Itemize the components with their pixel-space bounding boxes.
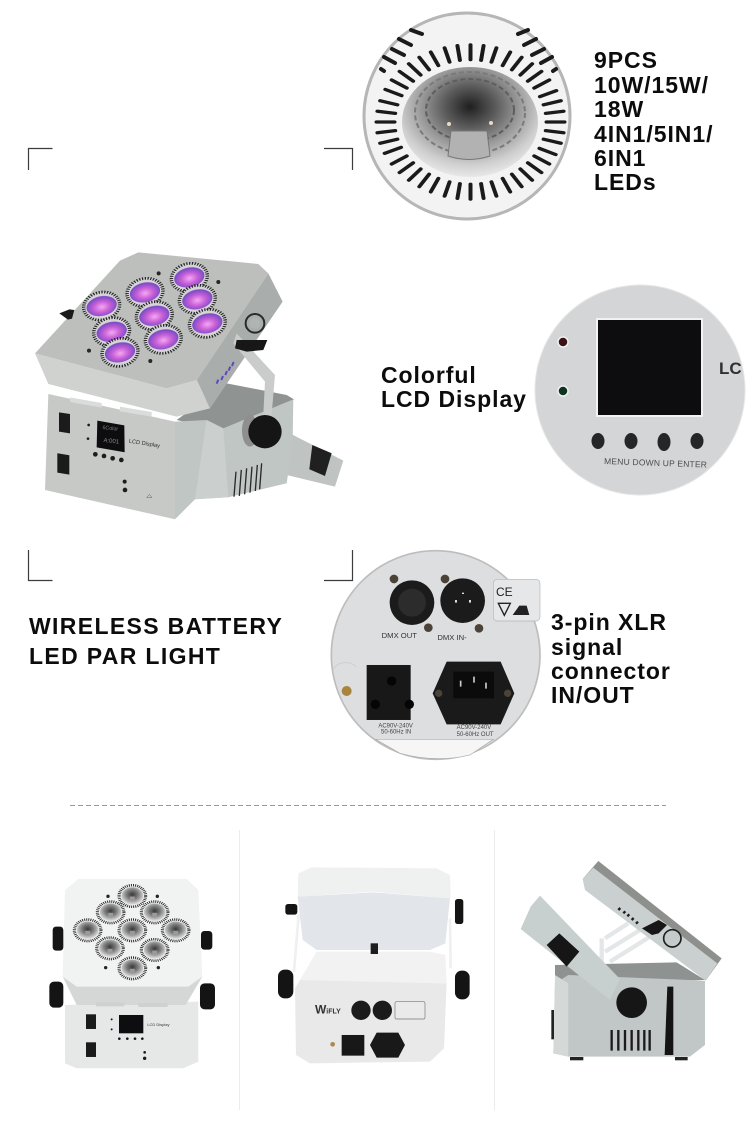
AC output label: 50-60Hz OUT (457, 732, 494, 738)
front base (65, 1002, 198, 1068)
connector caption: signal (551, 634, 623, 660)
DMX OUT connector (390, 575, 434, 632)
hinges (70, 397, 152, 417)
certification marks: CE (496, 585, 513, 599)
lamp head (298, 867, 451, 950)
panel controls (86, 1014, 146, 1060)
product view: side (521, 861, 722, 1060)
fan (664, 930, 681, 947)
LED specification text: 9PCS (594, 47, 658, 73)
stand label (309, 445, 332, 476)
dashed divider (70, 804, 666, 806)
LED vent slots (376, 30, 565, 199)
LCD Display label: LCD Display (147, 1022, 169, 1027)
LEDs (74, 885, 189, 979)
LED specification text: LEDs (594, 169, 657, 195)
LCD black screen (597, 319, 702, 416)
button labels: MENU DOWN UP ENTER (604, 456, 707, 470)
LCD screen (97, 421, 125, 452)
fan and side indicators (217, 314, 264, 384)
OUT socket (370, 1033, 405, 1058)
cert marks (395, 1002, 425, 1019)
certification marks (493, 579, 540, 621)
brass ground screw (333, 663, 356, 696)
ground screw (330, 1042, 335, 1047)
front buttons and indicators (87, 424, 152, 498)
left wing knob (59, 309, 74, 320)
head knob (235, 340, 267, 352)
rear socket edges (551, 1010, 554, 1039)
side knob (242, 415, 282, 448)
LED specification text: 6IN1 (594, 145, 646, 171)
lamp LEDs (81, 260, 228, 370)
side knobs (278, 899, 470, 999)
lamp head (35, 252, 283, 417)
IN socket (342, 1035, 364, 1056)
control buttons (592, 433, 704, 451)
lower edge band (376, 739, 493, 759)
corner brackets frame (28, 148, 352, 580)
base top (555, 962, 705, 983)
lamp face (63, 879, 202, 987)
DMX IN connector (440, 575, 485, 633)
lamp bevel (63, 977, 202, 1005)
base top surface (177, 383, 294, 430)
LED specification text: 10W/15W/ (594, 72, 709, 98)
screws (104, 895, 160, 969)
AC input label: 50-60Hz IN (381, 729, 411, 735)
vent grille (612, 1030, 650, 1051)
AC output label: AC90V-240V (457, 725, 491, 731)
connector caption: connector (551, 658, 671, 684)
LED specification text: 18W (594, 96, 644, 122)
LED close-up circle (364, 13, 570, 219)
base (295, 952, 447, 1063)
product title: LED PAR LIGHT (29, 643, 221, 669)
product title: WIRELESS BATTERY (29, 613, 283, 639)
status LEDs (558, 337, 568, 396)
head indicators (618, 908, 638, 924)
yoke bracket (233, 333, 275, 415)
connector caption: 3-pin XLR (551, 609, 667, 635)
yoke arms (602, 923, 650, 965)
rear connector close-up circle: DMX IN- (437, 633, 467, 642)
DMX connectors (351, 1001, 392, 1020)
main product: par light with purple LEDs: A:001 (103, 438, 120, 446)
rear connector close-up circle (331, 551, 540, 759)
head screws (87, 271, 220, 363)
Wifly logo: WiFLY (315, 1002, 341, 1016)
main product: par light with purple LEDs (35, 252, 343, 519)
base right side (175, 399, 293, 519)
connector labels: DMX OUT (382, 631, 417, 640)
LCD Display label: LCD Display (128, 439, 160, 450)
feet (570, 1057, 688, 1060)
AC input label: AC90V-240V (378, 724, 413, 730)
connector caption: IN/OUT (551, 682, 635, 708)
LED specification text: 4IN1/5IN1/ (594, 121, 713, 147)
center latch (371, 943, 378, 954)
stand plate (521, 896, 620, 1000)
hinges (96, 1002, 168, 1007)
yoke arms (294, 915, 451, 972)
large knob (616, 987, 647, 1018)
lamp head (583, 861, 722, 981)
LED reflector lens (402, 67, 538, 177)
LCD caption: Colorful (381, 362, 477, 388)
AC output socket (433, 662, 514, 724)
LCD close-up circle (535, 285, 745, 495)
base front panel (45, 394, 175, 519)
LC partial label: LC (719, 359, 742, 378)
AC input socket (367, 665, 414, 720)
LCD caption: LCD Display (381, 386, 527, 412)
vent grille (234, 463, 262, 497)
rear stand plate (277, 427, 343, 487)
head knob (642, 920, 667, 935)
power switches (57, 412, 70, 475)
side slot (665, 987, 673, 1055)
side knobs (49, 927, 215, 1009)
product view: rear (278, 867, 470, 1063)
screen text: 6Color (102, 425, 119, 433)
product view: front (49, 879, 215, 1068)
base body (553, 975, 705, 1057)
